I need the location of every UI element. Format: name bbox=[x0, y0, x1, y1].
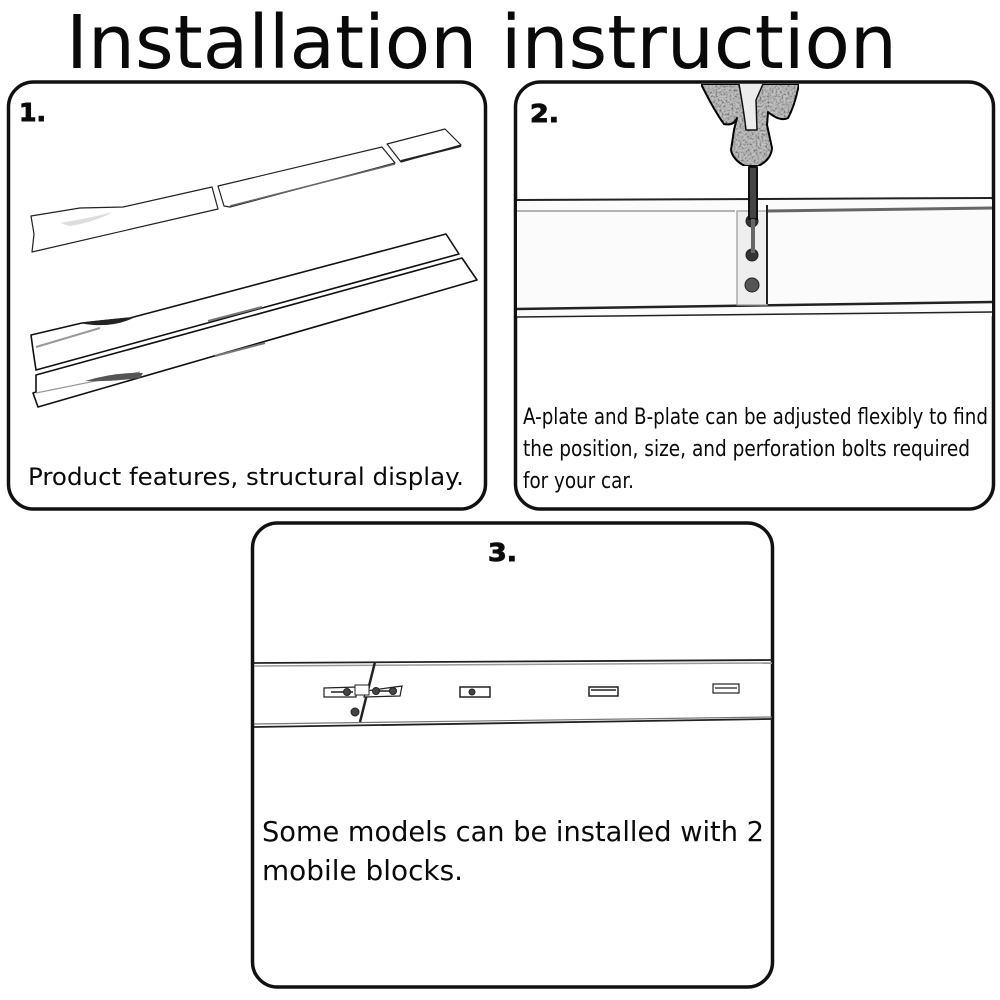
illustration: plates joined with a bolt bbox=[517, 198, 992, 317]
step number 1: 1. bbox=[19, 98, 46, 127]
caption 2 bbox=[523, 405, 988, 494]
step number 2: 2. bbox=[530, 99, 559, 128]
caption 3: mobile blocks. bbox=[262, 854, 463, 887]
caption 2: for your car. bbox=[523, 469, 634, 494]
caption 1: Product features, structural display. bbox=[28, 463, 464, 491]
illustration: skirt with mobile blocks bbox=[254, 660, 772, 727]
panel 3: mobile blocks bbox=[252, 523, 772, 987]
panel 1: product structure bbox=[8, 82, 486, 509]
step number 3: 3. bbox=[488, 538, 517, 567]
title: Installation instruction bbox=[66, 0, 897, 86]
illustration: two assembled side skirts bbox=[31, 234, 477, 407]
panel 2: plate adjustment bbox=[516, 82, 994, 509]
caption 3 bbox=[262, 815, 764, 887]
caption 3: Some models can be installed with 2 bbox=[262, 815, 764, 848]
icon: screwdriver bbox=[701, 84, 799, 253]
illustration: three separated side skirt pieces bbox=[31, 129, 461, 252]
